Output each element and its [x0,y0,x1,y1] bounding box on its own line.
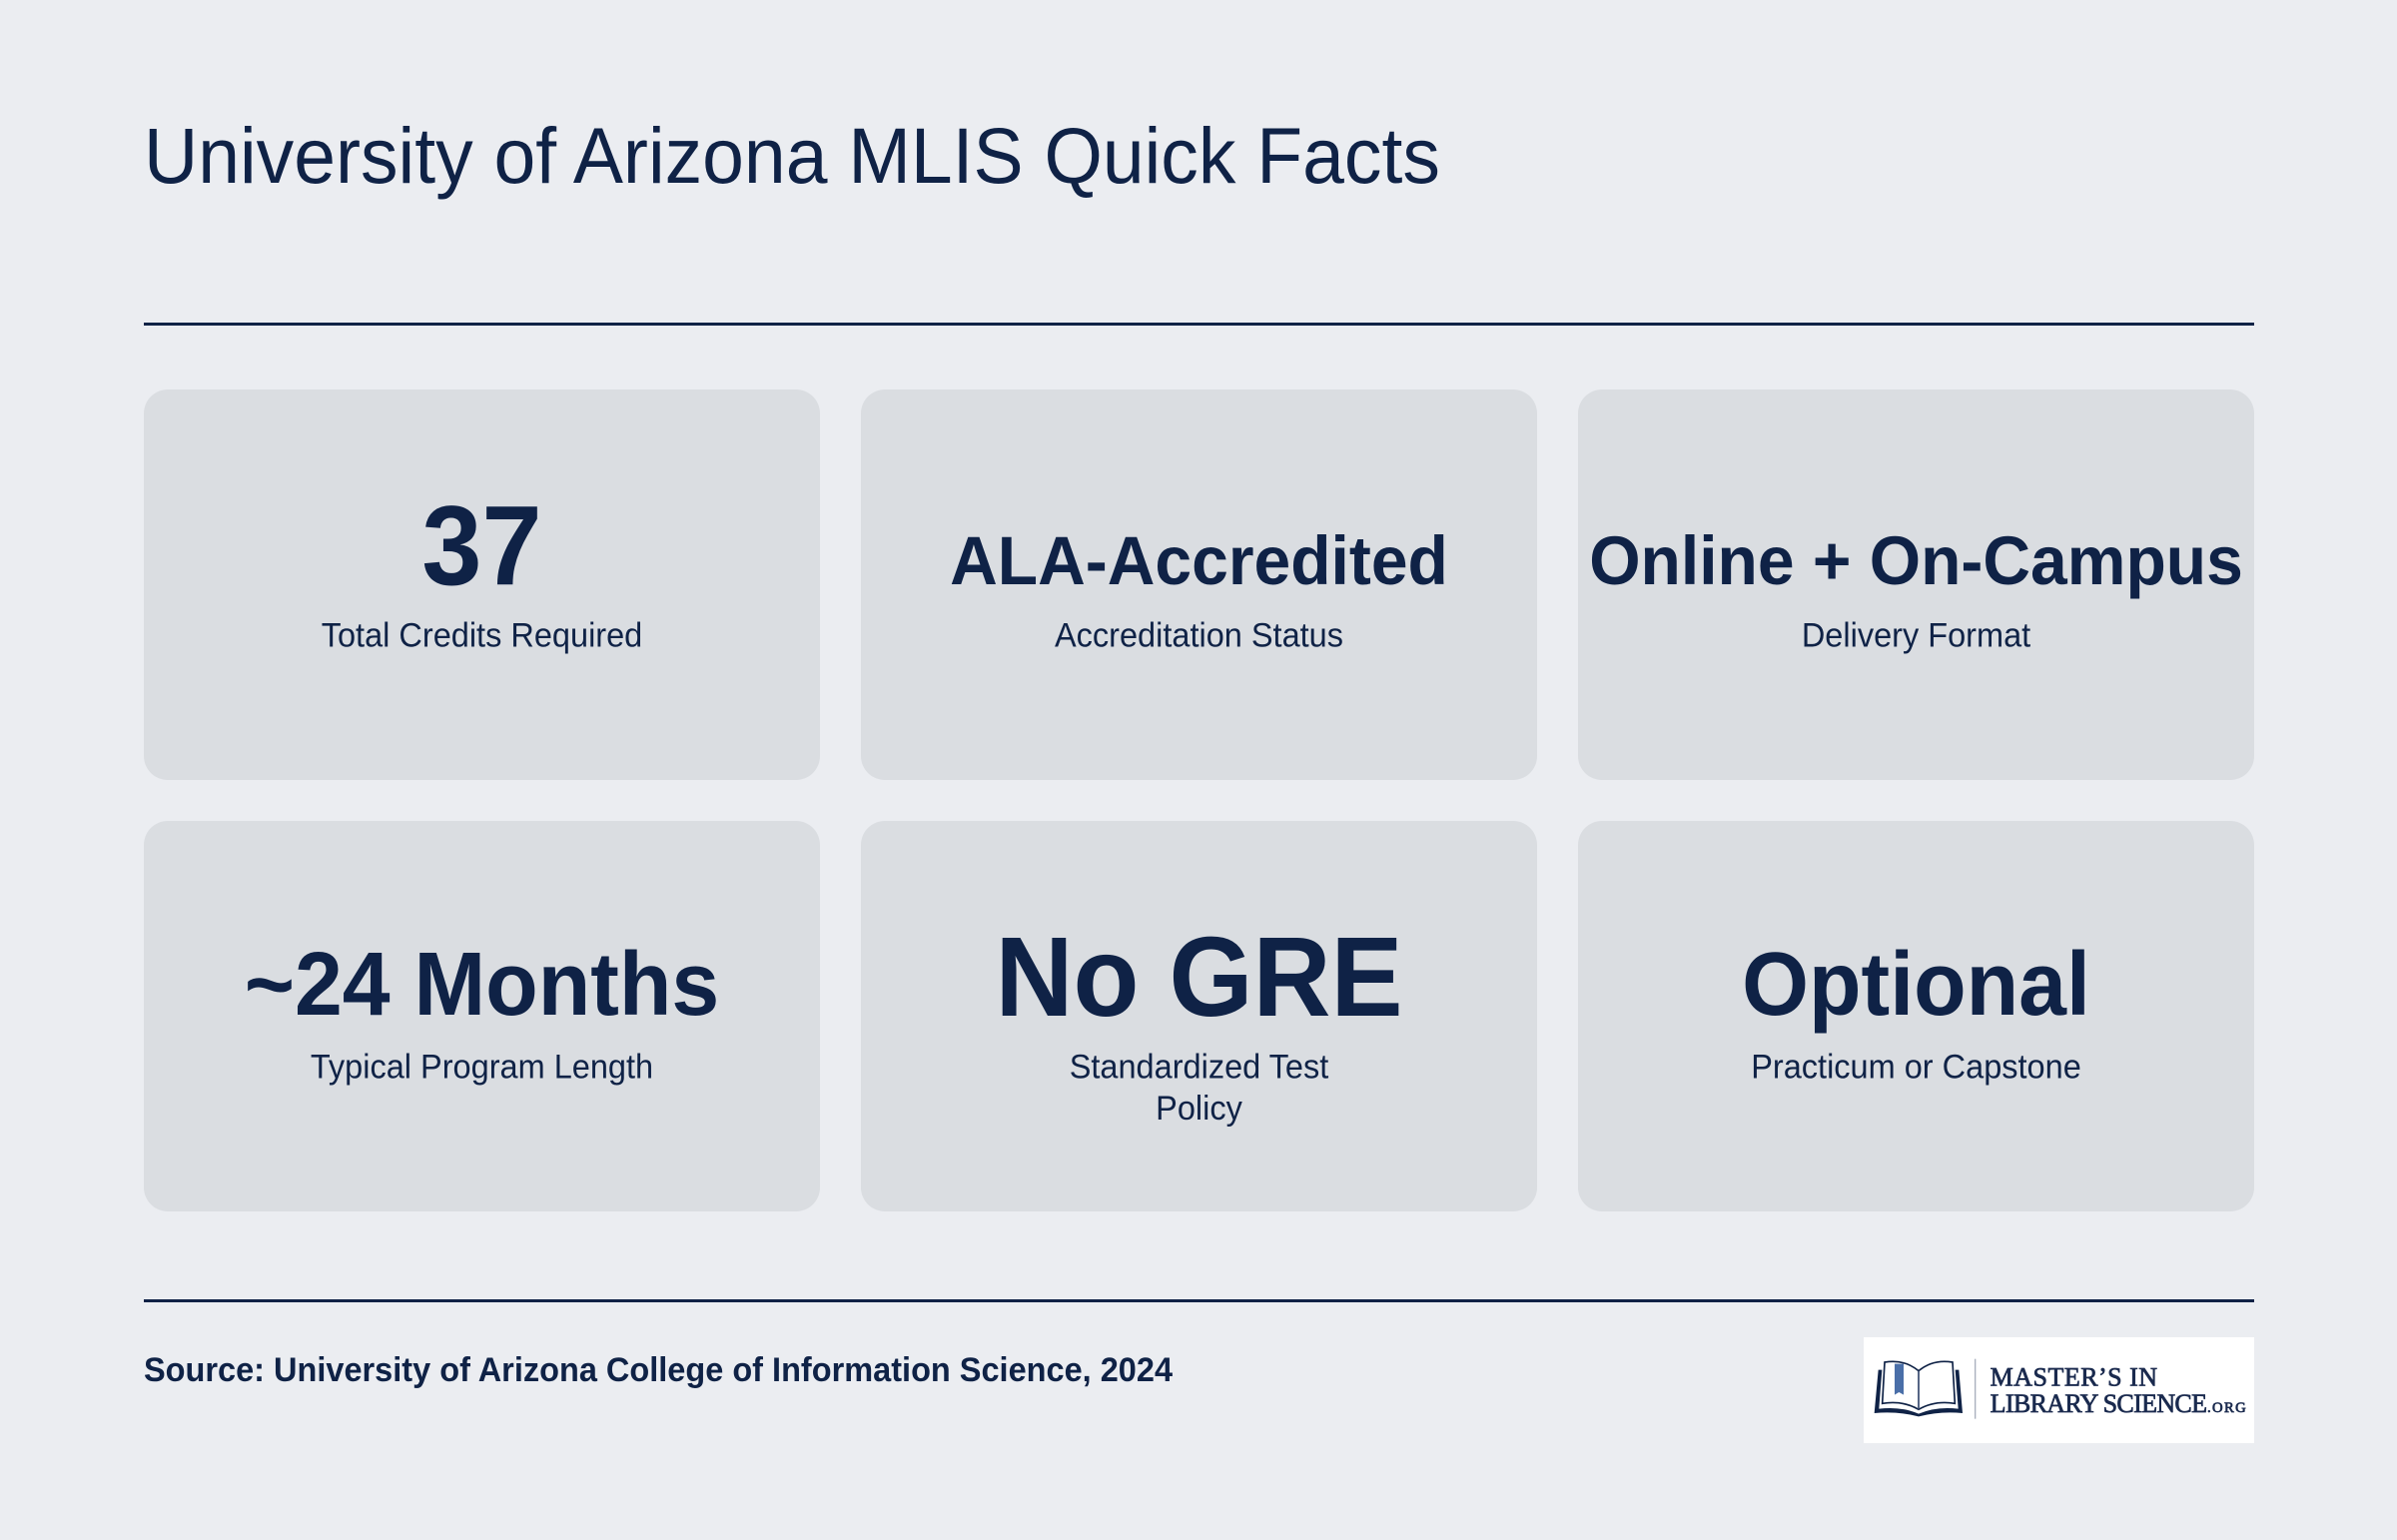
logo text: .ORG [2207,1400,2246,1416]
value: 37: 37 [421,481,542,608]
logo text [1991,1363,2246,1418]
panel: delivery format [1578,389,2254,780]
label: accreditation status: Accreditation Status [1055,616,1343,654]
title: University of Arizona MLIS Quick Facts [144,112,1440,200]
label: standardized test policy: Policy [1156,1090,1242,1128]
panel: total credits [144,389,820,780]
value: ALA-Accredited: ALA-Accredited [950,521,1448,599]
label: practicum or capstone: Practicum or Capstone [1751,1048,2081,1086]
icon: open book [1875,1361,1963,1416]
label: standardized test policy: Standardized Test [1070,1048,1328,1086]
panel: test policy [861,821,1537,1211]
value: no GRE: No GRE [995,913,1402,1040]
panel: accreditation [861,389,1537,780]
panel: program length [144,821,820,1211]
value: online + on-campus: Online + On-Campus [1589,521,2243,599]
source note: Source: University of Arizona College of Information Science, 2024 [144,1350,1173,1388]
value: 24 months: ~24 Months [245,935,719,1035]
label: program length: Typical Program Length [311,1048,653,1086]
logo [1864,1337,2254,1443]
logo text: LIBRARY SCIENCE [1991,1389,2207,1418]
value: optional: Optional [1742,935,2090,1035]
panel: practicum [1578,821,2254,1211]
label: total credits: Total Credits Required [322,616,642,654]
label: delivery format: Delivery Format [1802,616,2030,654]
label: standardized test policy [1070,1048,1328,1128]
logo text: MASTER’S IN [1991,1363,2157,1392]
